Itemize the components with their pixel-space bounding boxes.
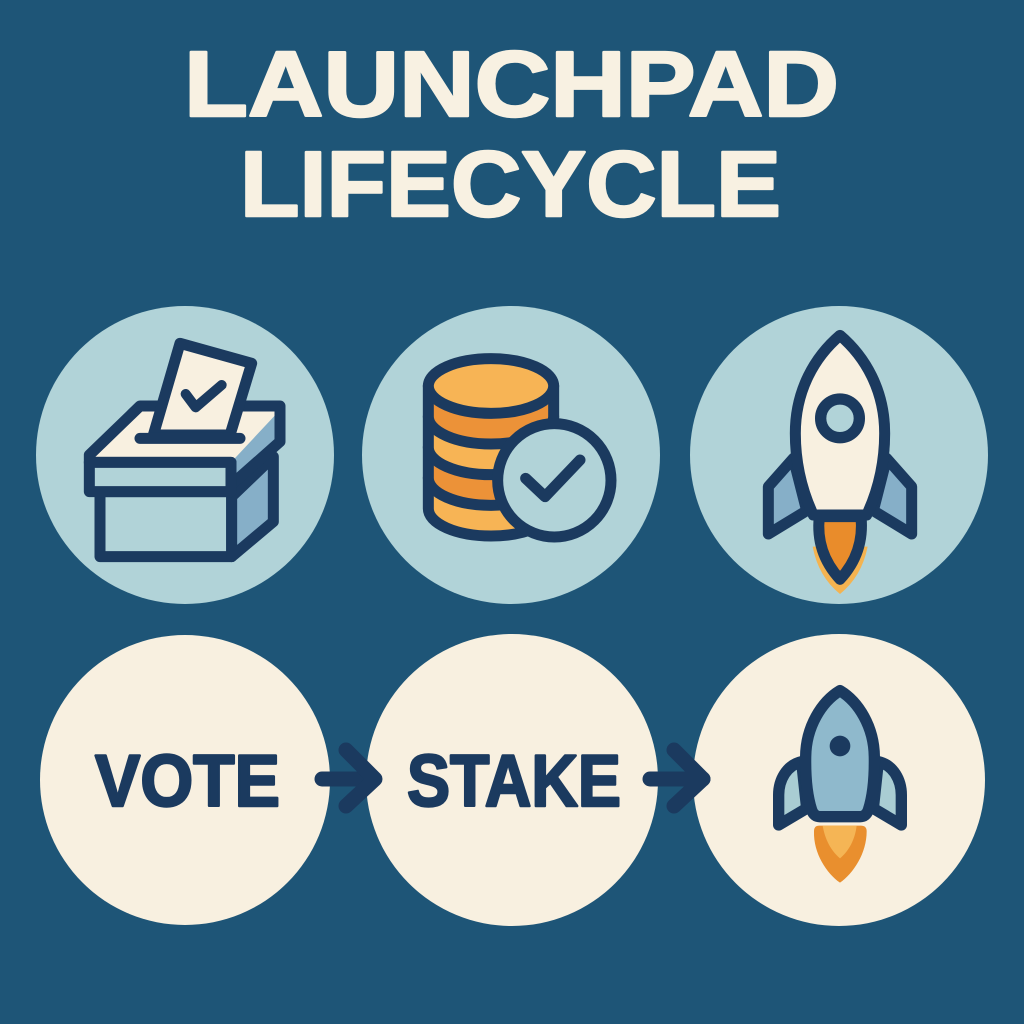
panel: coin stack icon circle	[362, 306, 660, 604]
panel: stake step	[366, 634, 658, 926]
title	[184, 32, 839, 236]
label: vote: VOTE	[95, 741, 280, 822]
icon: rocket with flame	[779, 691, 901, 883]
title: LIFECYCLE	[240, 132, 781, 236]
label: stake: STAKE	[407, 741, 621, 822]
panel: rocket icon circle	[690, 306, 988, 604]
panel: vote step	[40, 635, 330, 925]
title: LAUNCHPAD	[184, 32, 839, 136]
icon: ballot box	[89, 343, 280, 557]
icon: launching rocket	[768, 335, 912, 594]
arrow: vote to stake	[322, 750, 375, 806]
panel: ballot box icon circle	[36, 306, 334, 604]
icon: verified coin stack	[428, 359, 611, 537]
arrow: stake to launch	[650, 750, 703, 806]
panel: launch step	[693, 634, 985, 926]
